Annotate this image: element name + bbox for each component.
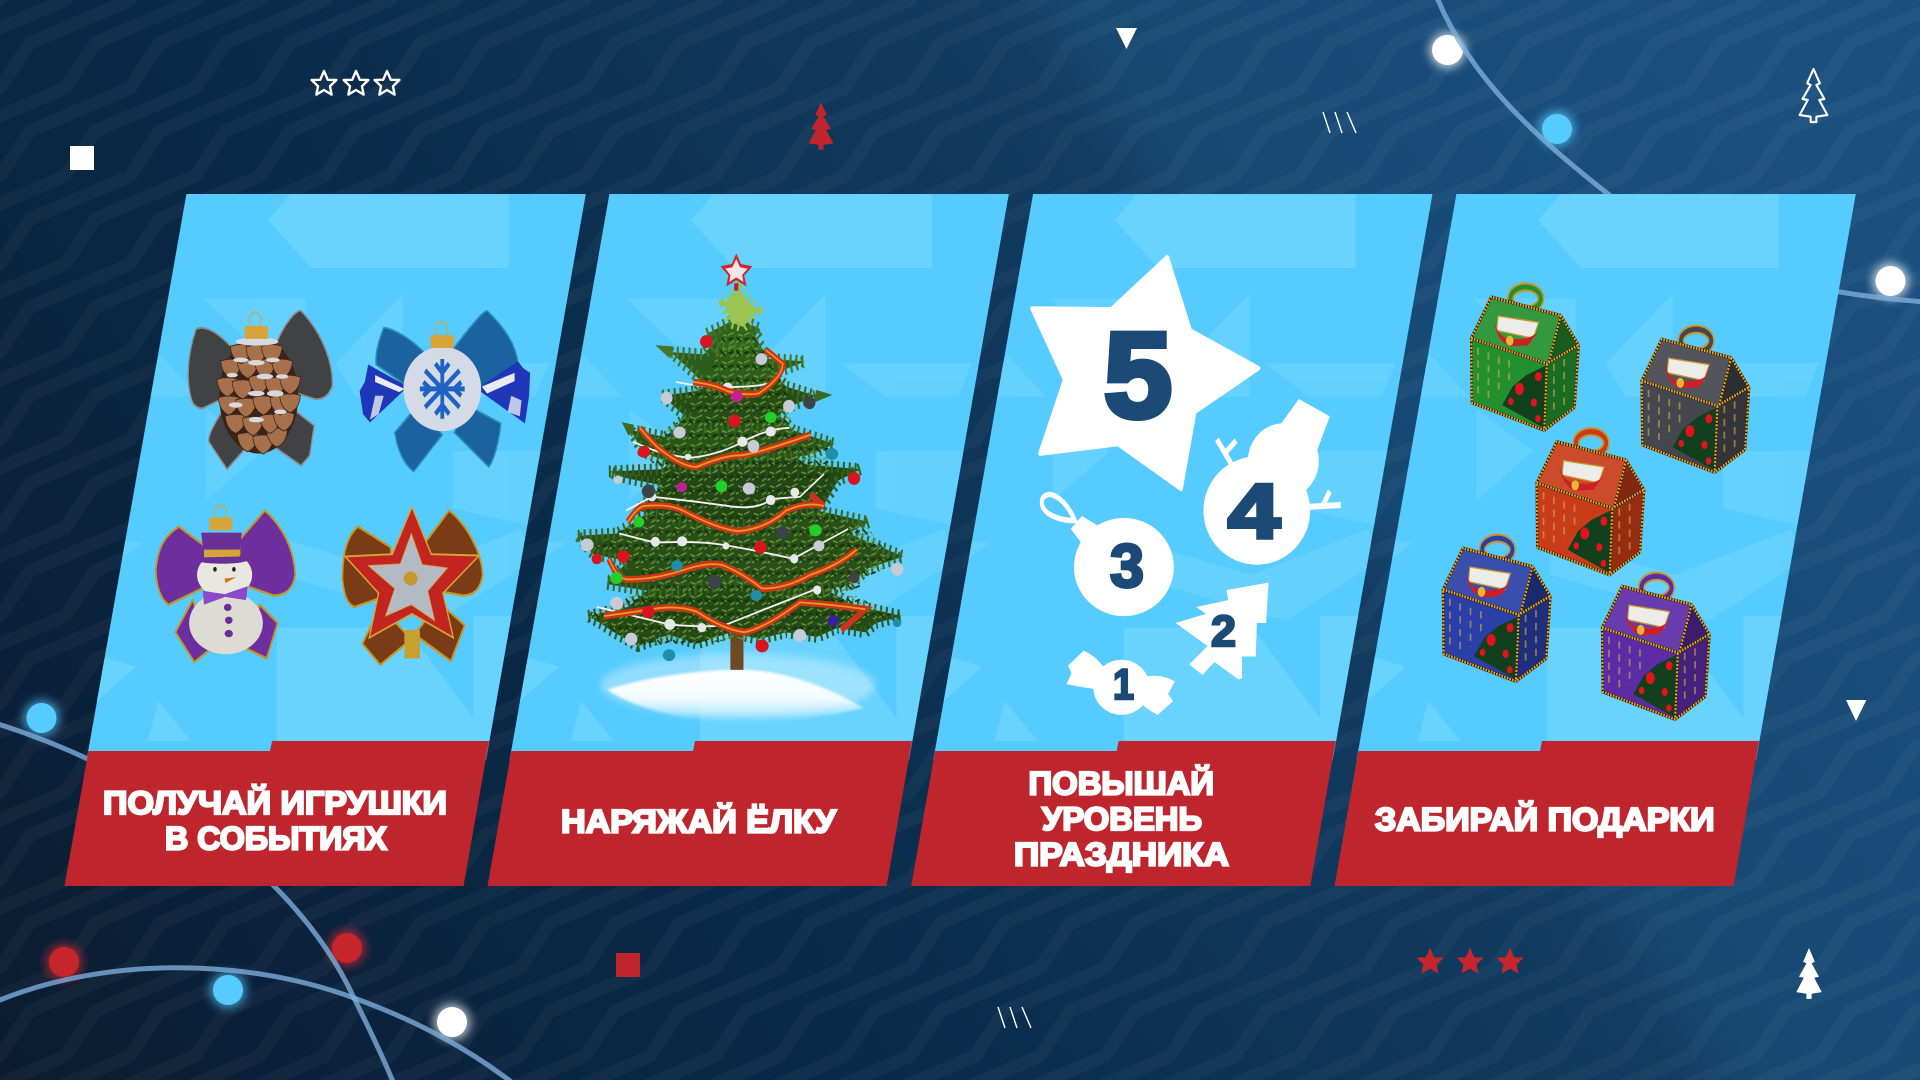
icon: red tree	[809, 102, 833, 150]
gift: green	[1471, 287, 1579, 430]
level numbers: 4	[1228, 469, 1280, 555]
icon: snowman ornament	[156, 505, 295, 662]
heading: toys: ПОЛУЧАЙ ИГРУШКИ	[103, 785, 447, 821]
trunk	[730, 632, 743, 670]
icon: outlined stars	[312, 71, 399, 95]
needle texture	[588, 332, 893, 646]
heading: levels: УРОВЕНЬ	[1042, 801, 1202, 837]
baubles	[581, 335, 903, 661]
heading: levels: ПОВЫШАЙ	[1028, 766, 1214, 802]
gift: blue	[1443, 538, 1550, 681]
panel: tree	[488, 194, 1009, 886]
gift: purple	[1602, 576, 1710, 719]
level numbers	[1104, 307, 1280, 709]
light: blue top	[1539, 111, 1575, 147]
heading: tree: НАРЯЖАЙ ЁЛКУ	[561, 804, 837, 840]
heading: gifts: ЗАБИРАЙ ПОДАРКИ	[1375, 802, 1714, 838]
icon: star level	[1032, 257, 1259, 489]
icon: star ornament	[342, 507, 483, 665]
level numbers: 1	[1113, 661, 1134, 709]
light: white bottom	[434, 1004, 470, 1040]
icon: white tree	[1796, 948, 1822, 999]
heading: toys	[103, 785, 447, 856]
icon: hatch bottom	[998, 1007, 1031, 1028]
icon: candy ornament	[360, 311, 530, 472]
icon: christmas tree	[578, 253, 903, 721]
icon: hatch top	[1323, 112, 1356, 133]
light: red middle	[329, 930, 365, 966]
icon: white square	[70, 146, 94, 170]
tree top star	[720, 253, 752, 291]
level numbers: 5	[1104, 307, 1172, 443]
icon: snowman level	[1203, 399, 1341, 565]
icon: pinecone ornament	[188, 311, 332, 469]
garlands	[597, 377, 848, 626]
snow mound	[600, 654, 876, 721]
gift: gray	[1642, 329, 1749, 472]
ribbons	[604, 350, 865, 632]
heading: levels: ПРАЗДНИКА	[1014, 836, 1229, 872]
icon: gift boxes	[1443, 287, 1749, 719]
gift: red	[1537, 432, 1644, 575]
light: red left	[46, 944, 82, 980]
light: blue bottom	[210, 972, 246, 1008]
heading: levels	[1014, 766, 1229, 872]
light: white top	[1430, 32, 1466, 68]
icon: red square	[616, 953, 640, 977]
panel: gifts	[1334, 194, 1856, 886]
heading: toys: В СОБЫТИЯХ	[165, 820, 388, 856]
icon: tree level	[1176, 583, 1269, 680]
icon: bauble level	[1042, 495, 1174, 616]
light: white right	[1872, 263, 1908, 299]
icon: red stars	[1416, 948, 1524, 974]
level numbers: 2	[1211, 607, 1236, 656]
light: blue left	[24, 700, 60, 736]
level numbers: 3	[1110, 532, 1144, 600]
panel: levels	[911, 194, 1432, 886]
icon: candy level	[1066, 651, 1175, 715]
icon: outlined tree	[1800, 69, 1827, 122]
branches	[578, 289, 903, 646]
icon: white triangle right	[1846, 700, 1866, 721]
panel: toys	[64, 194, 586, 886]
icon: white triangle top	[1116, 28, 1137, 49]
level silhouettes	[1032, 257, 1341, 715]
icon: toys group	[156, 311, 530, 665]
